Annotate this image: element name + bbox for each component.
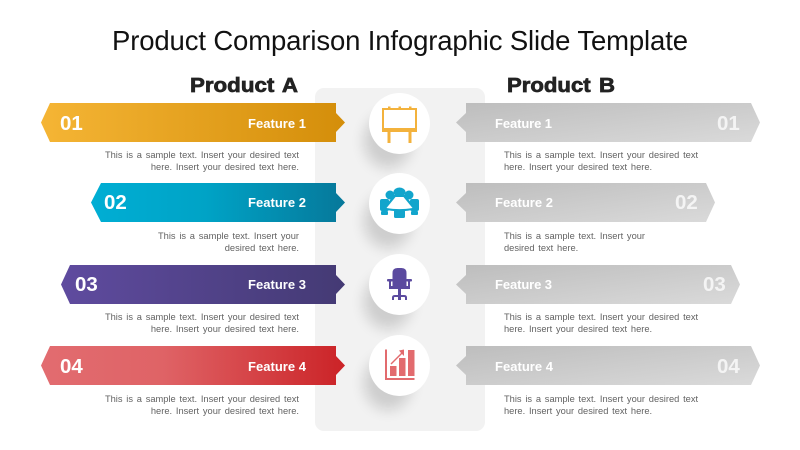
title: Product Comparison Infographic Slide Template [112, 25, 688, 56]
number 02: 02 [104, 191, 127, 214]
heading: Product A: Product A [190, 75, 298, 97]
label: Feature 2 [248, 195, 306, 210]
panel: Product A feature 4 [41, 346, 345, 416]
description: This is a sample text. Insert your desired text [105, 394, 299, 404]
description: here. Insert your desired text here. [504, 406, 652, 416]
panel: centre column [315, 88, 485, 431]
description: This is a sample text. Insert your desired text [105, 150, 299, 160]
description: here. Insert your desired text here. [151, 406, 299, 416]
description: This is a sample text. Insert your desired text [504, 394, 698, 404]
description: here. Insert your desired text here. [504, 162, 652, 172]
icon: office chair in circle [364, 254, 430, 329]
banner: A feature 4 [41, 346, 345, 385]
banner: A feature 1 [41, 103, 345, 142]
label: Feature 3 [248, 277, 306, 292]
icon: billboard in circle [364, 93, 430, 168]
number 01: 01 [60, 112, 83, 135]
label: Feature 4 [248, 359, 307, 374]
icon: conference table in circle [364, 173, 430, 248]
number 03: 03 [75, 273, 98, 296]
panel: Product A feature 1 [41, 103, 345, 172]
description: here. Insert your desired text here. [151, 324, 299, 334]
description: This is a sample text. Insert your [158, 231, 299, 241]
description: This is a sample text. Insert your desired text [504, 312, 698, 322]
banner: A feature 2 [91, 183, 345, 222]
number 04: 04 [717, 355, 740, 378]
number 02: 02 [675, 191, 698, 214]
label: Feature 1 [495, 116, 552, 131]
banner: B feature 2 [456, 183, 715, 222]
description: This is a sample text. Insert your desired text [105, 312, 299, 322]
label: Feature 2 [495, 195, 553, 210]
panel: Product B feature 2 [456, 183, 715, 253]
banner: B feature 1 [456, 103, 760, 142]
description: here. Insert your desired text here. [151, 162, 299, 172]
number 03: 03 [703, 273, 726, 296]
label: Feature 1 [248, 116, 306, 131]
panel: Product B feature 1 [456, 103, 760, 172]
panel: Product B feature 4 [456, 346, 760, 416]
number 01: 01 [717, 112, 740, 135]
panel: Product A feature 3 [61, 265, 345, 334]
banner: A feature 3 [61, 265, 345, 304]
description: This is a sample text. Insert your [504, 231, 645, 241]
label: Feature 3 [495, 277, 552, 292]
heading: Product B: Product B [507, 75, 615, 97]
banner: B feature 3 [456, 265, 740, 304]
number 04: 04 [60, 355, 83, 378]
panel: Product B feature 3 [456, 265, 740, 334]
description: desired text here. [225, 243, 299, 253]
panel: Product A feature 2 [91, 183, 345, 253]
banner: B feature 4 [456, 346, 760, 385]
icon: rising bar chart in circle [364, 335, 430, 410]
description: desired text here. [504, 243, 578, 253]
description: here. Insert your desired text here. [504, 324, 652, 334]
description: This is a sample text. Insert your desired text [504, 150, 698, 160]
label: Feature 4 [495, 359, 554, 374]
